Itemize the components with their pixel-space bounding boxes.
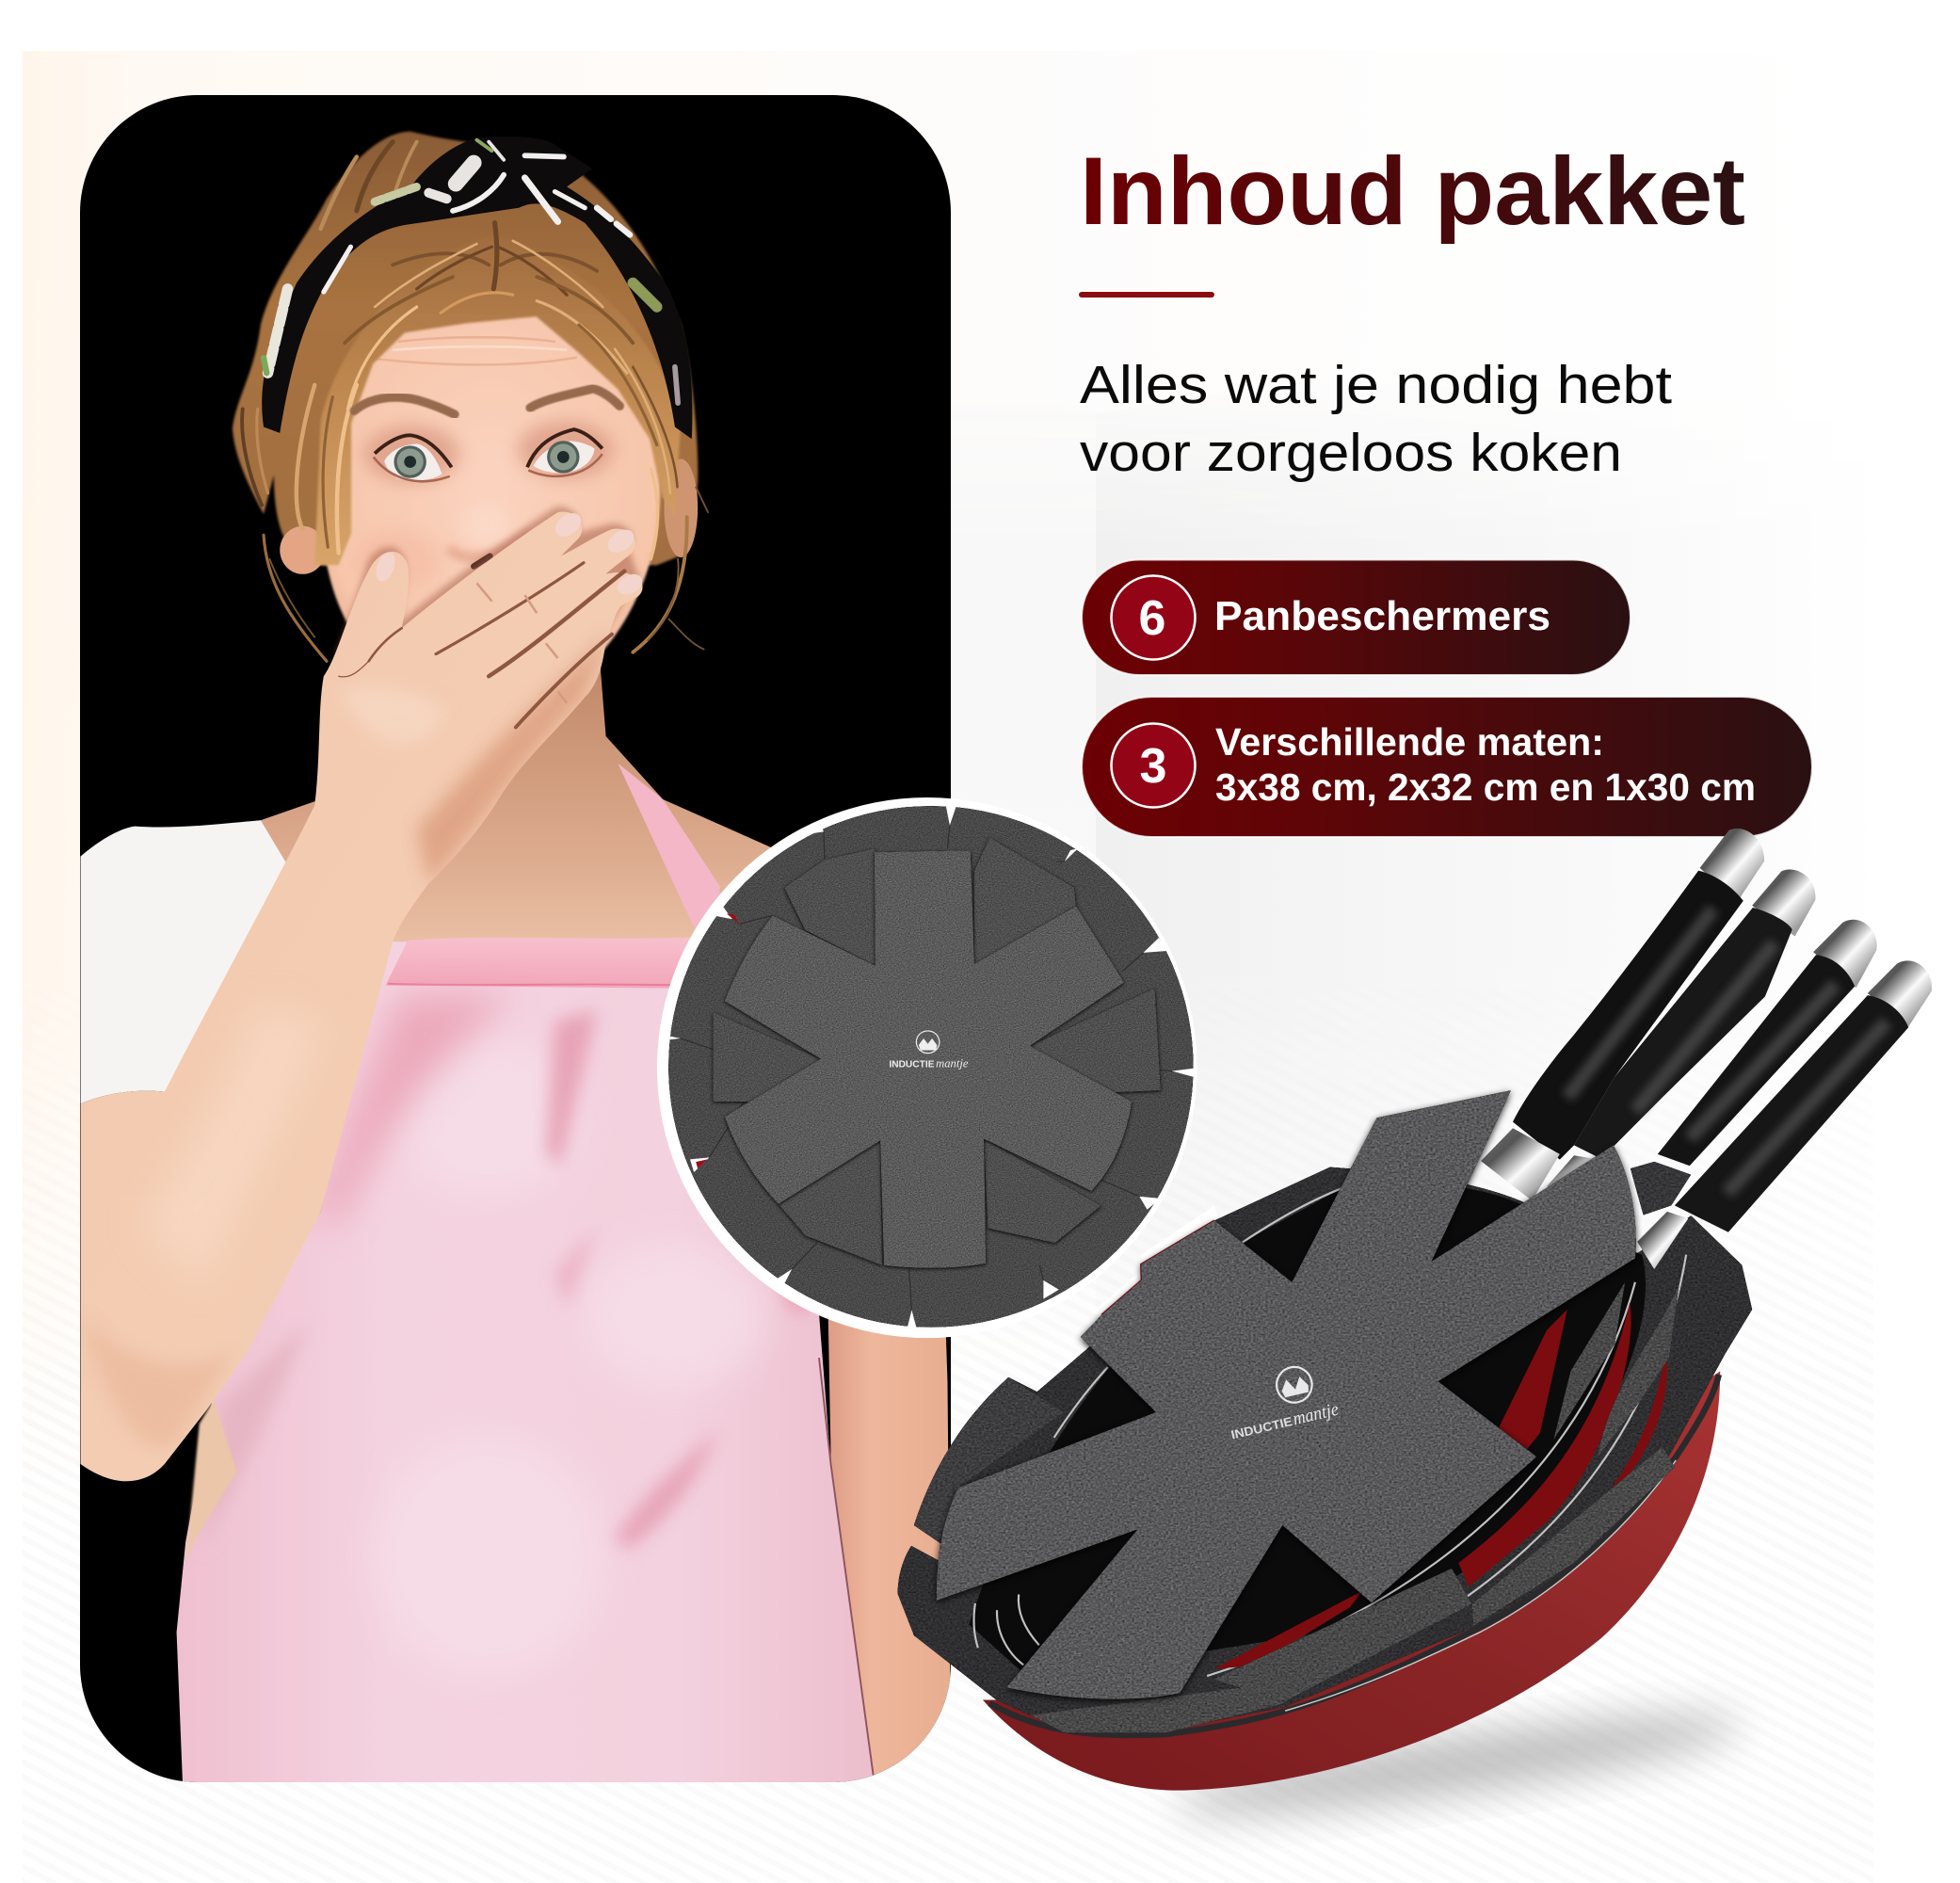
right arm [828, 1310, 951, 1782]
logo: INDUCTIE [889, 1059, 935, 1070]
headband pattern [264, 140, 678, 403]
nose [450, 502, 531, 567]
grip highlights [1567, 909, 1887, 1193]
white streak by circle [1091, 1205, 1218, 1315]
top felt star [725, 850, 1132, 1268]
label: Verschillende maten: [1215, 720, 1604, 764]
title underline [1079, 292, 1214, 298]
outer felt layer [668, 806, 1194, 1328]
forehead lines [373, 337, 577, 364]
hand shading [81, 631, 612, 1447]
black grips [1574, 908, 1792, 1159]
red outer pan [983, 1371, 1720, 1791]
rim [989, 1375, 1719, 1735]
label [1215, 720, 1756, 809]
eye: right [527, 429, 602, 476]
felt strips [1030, 1282, 1679, 1732]
badge 6: 6 [1139, 591, 1165, 646]
eyebrows [354, 397, 455, 414]
hair [233, 132, 698, 565]
pill: 3 maten [1082, 697, 1812, 837]
white ring [657, 797, 1197, 1338]
notches [666, 804, 1196, 1328]
background panel [23, 51, 1527, 1427]
badge 6 [1111, 576, 1196, 659]
rim highlight [1285, 1460, 1676, 1711]
label: 3x38 cm, 2x32 cm en 1x30 cm [1215, 765, 1756, 809]
chest and neck [260, 668, 771, 942]
panel: woman photo [80, 95, 951, 1782]
knuckle marks [476, 583, 567, 703]
logo on star: mantje [1291, 1399, 1341, 1429]
pill: 6 panbeschermers [1082, 559, 1631, 675]
eye: left [374, 435, 452, 481]
apron [177, 764, 897, 1782]
logo on star: INDUCTIE [1229, 1414, 1294, 1442]
torso sliver [186, 1400, 236, 1562]
finger creases [339, 563, 624, 727]
subtitle: Alles wat je nodig hebt [1080, 355, 1672, 415]
face [326, 314, 662, 652]
shirt sleeve [81, 820, 288, 1103]
hair strands [242, 142, 708, 661]
black interior [969, 1183, 1646, 1680]
woman figure [81, 132, 951, 1782]
ferrules [1481, 1128, 1560, 1200]
badge 3 [1111, 723, 1196, 808]
logo on star [1219, 1359, 1341, 1444]
ears [280, 526, 326, 574]
felt left lobe [914, 1377, 1064, 1542]
outer seams [681, 826, 1172, 1310]
middle felt layer [714, 837, 1161, 1265]
dark felt base [898, 1167, 1752, 1730]
cheeks [368, 536, 435, 580]
headband [262, 137, 692, 439]
title: Inhoud pakket [1080, 137, 1745, 245]
felt top star [937, 1090, 1636, 1699]
red specks [696, 913, 739, 1168]
subtitle: voor zorgeloos koken [1080, 423, 1622, 483]
logo [889, 1031, 969, 1070]
logo: mantje [936, 1055, 969, 1070]
pans with felt protector [898, 829, 1932, 1833]
head [233, 132, 708, 709]
hair frame [314, 288, 682, 567]
shadow [1172, 1697, 1745, 1833]
badge 3: 3 [1140, 739, 1166, 794]
nails [373, 508, 646, 599]
zoom circle: felt protector set [657, 797, 1197, 1338]
inner rims [973, 1188, 1686, 1697]
handles [1481, 829, 1932, 1269]
arm and hand [81, 507, 646, 1481]
silver tips [1700, 829, 1932, 1029]
eye sockets [364, 426, 460, 483]
subtitle [1080, 355, 1672, 483]
red streak edge [1101, 1220, 1214, 1315]
hand shadow [336, 507, 639, 681]
red inner pans [1213, 1303, 1667, 1669]
felt scrap by handle [1631, 1162, 1691, 1215]
label: Panbeschermers [1214, 593, 1550, 639]
